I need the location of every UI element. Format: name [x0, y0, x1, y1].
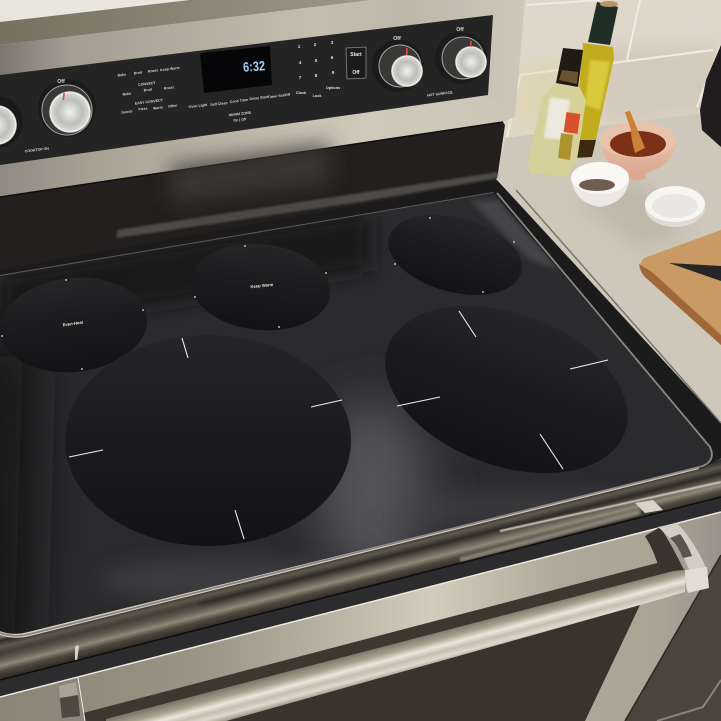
number keypad: 3	[331, 40, 334, 45]
door top clip	[635, 500, 663, 513]
mode button labels: Keep Warm	[160, 66, 180, 72]
handle bracket	[645, 523, 709, 593]
number keypad: 8	[315, 73, 318, 78]
gap under door panel	[83, 563, 690, 721]
mode button labels: CONVECT	[138, 81, 157, 87]
knife	[669, 263, 721, 281]
dark canister	[700, 45, 721, 147]
large front left burner	[65, 335, 351, 546]
number keypad: Options	[326, 86, 340, 90]
cabinet beside the oven	[625, 555, 721, 721]
mode button labels: Warm	[153, 105, 163, 111]
lower steel strip	[0, 95, 515, 197]
knob left	[38, 79, 96, 137]
white salt dish	[645, 186, 705, 227]
pink bowl of chili flakes	[600, 111, 676, 180]
knob left: Off	[57, 79, 65, 85]
hinge clip	[75, 645, 79, 662]
front chrome trim	[0, 458, 721, 680]
mode button labels: COOKTOP ON	[25, 146, 50, 153]
mode button labels: On | Off	[233, 117, 247, 123]
brown backguard strip	[0, 0, 372, 45]
glass edge highlight	[0, 193, 712, 636]
mode button labels: Broil	[134, 71, 142, 75]
cooktop frame	[0, 180, 721, 480]
keep warm burner	[186, 237, 335, 337]
mode button labels: Broil	[144, 88, 152, 92]
mode button labels: Oven Light	[188, 103, 208, 109]
oven window	[226, 605, 640, 721]
knob right 1	[372, 36, 424, 92]
bottle cap	[556, 48, 583, 87]
cutting board with knife	[639, 230, 721, 345]
number keypad: 4	[299, 60, 302, 65]
number keypad: 1	[298, 44, 301, 49]
number keypad: 5	[315, 58, 318, 63]
door handle	[106, 568, 685, 721]
knob right 2	[435, 27, 487, 84]
clear oil bottle	[528, 48, 586, 177]
start off button: Off	[352, 70, 360, 76]
mode button labels: Other	[168, 103, 178, 109]
mode button labels: HOT SURFACE	[427, 90, 453, 98]
number keypad: 7	[299, 75, 302, 80]
back left burner	[0, 271, 152, 379]
large front right burner	[362, 275, 651, 504]
start off button	[346, 47, 366, 79]
back right burner	[379, 202, 531, 308]
clock display	[200, 46, 272, 93]
green oil bottle	[575, 1, 618, 158]
back left burner: Even-Heat	[62, 320, 84, 327]
number keypad	[296, 40, 340, 98]
mode button labels: Goods	[121, 109, 133, 115]
number keypad: 2	[314, 42, 317, 47]
mode button labels	[25, 66, 453, 153]
wooden spoon	[625, 111, 645, 153]
oven door stainless	[0, 497, 721, 721]
mode button labels: Cook Time	[230, 98, 248, 104]
number keypad: 6	[331, 55, 334, 60]
mode button labels: Bake	[117, 72, 126, 78]
mode button labels: WARM ZONE	[229, 111, 252, 117]
keep warm burner: Keep Warm	[250, 282, 274, 289]
clock display: 6:32	[243, 58, 266, 75]
knob right 1: Off	[393, 36, 401, 42]
number keypad: Lock	[313, 94, 322, 98]
backguard stainless panel	[0, 0, 525, 197]
mode button labels: Pizza	[138, 106, 149, 112]
mode button labels: Roast	[148, 68, 159, 74]
mode button labels: Timer Set/Off	[267, 93, 291, 99]
mode button labels: Delay Start	[249, 95, 269, 101]
wall tile backsplash	[0, 0, 721, 150]
dark back band of the range	[0, 122, 505, 275]
top tile strip	[0, 0, 190, 22]
control panel	[0, 15, 493, 165]
countertop	[498, 111, 721, 445]
mode button labels: EASY CONVECT	[135, 98, 164, 106]
left handle bracket	[57, 678, 85, 721]
mode button labels: Roast	[164, 85, 175, 91]
knob right 2: Off	[456, 27, 464, 33]
number keypad: 9	[332, 70, 335, 75]
mode button labels: Self Clean	[210, 101, 228, 107]
knob far left	[0, 96, 23, 148]
start off button: Start	[350, 52, 362, 58]
number keypad: Clock	[296, 91, 307, 95]
glass cooktop	[0, 192, 712, 680]
mode button labels: Bake	[122, 91, 131, 97]
bottle cap	[588, 2, 618, 45]
white bowl with pepper	[571, 162, 629, 207]
